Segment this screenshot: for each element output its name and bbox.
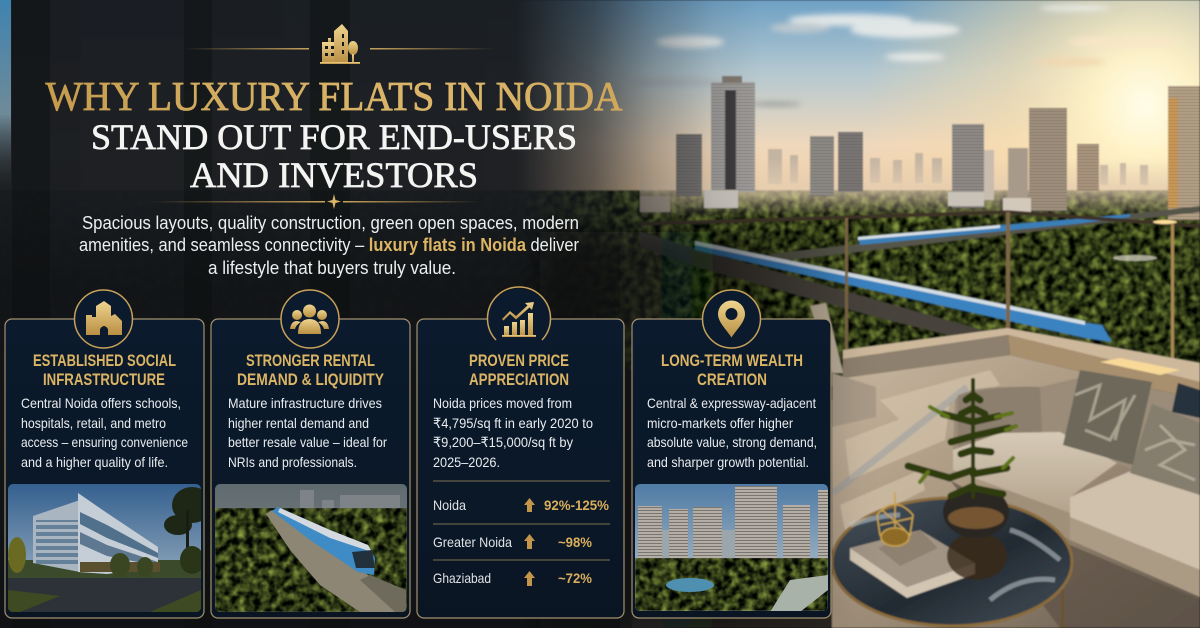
row: Greater Noida [433, 534, 593, 550]
heading: LONG-TERM WEALTH [661, 352, 803, 370]
icon: rising bar chart [488, 287, 551, 354]
light streak on floor [833, 387, 967, 493]
row: Noida [433, 497, 610, 513]
sky [0, 0, 1200, 240]
sun glow [800, 0, 1200, 320]
river glint [1113, 255, 1157, 261]
body text: higher rental demand and [228, 415, 369, 431]
row: Greater Noida: ~98% [558, 534, 593, 550]
row: Ghaziabad [433, 570, 593, 586]
table rules [433, 480, 610, 560]
body text [647, 395, 817, 470]
heading: CREATION [697, 371, 767, 389]
sofa [953, 373, 1200, 597]
panel: long-term wealth creation [632, 290, 831, 618]
row: Ghaziabad: Ghaziabad [433, 570, 491, 586]
body text: Central Noida offers schools, [21, 395, 181, 411]
dark overlay on left of photo [0, 0, 760, 628]
lower foliage behind glass [640, 226, 1200, 386]
shadow over trees behind cards [540, 232, 860, 628]
bottom left darkening [0, 200, 620, 628]
terrace floor [832, 355, 1200, 628]
glass railing [640, 212, 1200, 374]
dark glass vase [943, 486, 1009, 580]
subtitle paragraph [79, 213, 579, 278]
title line 3: AND INVESTORS [190, 155, 478, 195]
title line 2: STAND OUT FOR END-USERS [91, 117, 577, 157]
gold lantern [877, 492, 913, 546]
icon: gold buildings crest [320, 24, 360, 64]
body text: NRIs and professionals. [228, 454, 357, 470]
fern plant [908, 380, 1016, 497]
row: Ghaziabad: ~72% [558, 570, 593, 586]
crest rules [185, 48, 494, 50]
body text: and a higher quality of life. [21, 454, 168, 470]
terrace parapet [843, 328, 1200, 400]
body text: Noida prices moved from [433, 395, 572, 411]
title [46, 73, 623, 195]
icon: group of people [281, 290, 339, 348]
photo: metro train on viaduct [215, 484, 407, 612]
near metro viaduct [640, 232, 1000, 348]
body text: better resale value – ideal for [228, 434, 387, 450]
row: Greater Noida: Greater Noida [433, 534, 512, 550]
body text: ₹9,200–₹15,000/sq ft by [433, 434, 573, 450]
heading: DEMAND & LIQUIDITY [237, 371, 384, 389]
panel: stronger rental demand and liquidity [211, 290, 410, 618]
card background [211, 319, 410, 618]
icon: city buildings [74, 290, 132, 348]
body text [433, 395, 593, 470]
far metro viaduct and train [770, 206, 1200, 261]
photo: residential towers and gardens [635, 484, 828, 612]
subtitle paragraph: Spacious layouts, quality construction, green open spaces, modern [82, 213, 579, 233]
trees and city ground [0, 190, 1200, 370]
body text: absolute value, strong demand, [647, 434, 817, 450]
blue sky strip at left edge [0, 0, 11, 190]
row: Noida: 92%-125% [544, 497, 610, 513]
row: Noida: Noida [433, 497, 466, 513]
icon: location pin [702, 290, 760, 348]
heading: ESTABLISHED SOCIAL [33, 352, 176, 370]
body text: 2025–2026. [433, 454, 500, 470]
floor shade under cards [632, 400, 832, 628]
subtitle paragraph: a lifestyle that buyers truly value. [208, 258, 456, 278]
body text [228, 395, 387, 470]
card background [5, 319, 204, 618]
stack of books [850, 530, 975, 598]
body text [21, 395, 188, 470]
round marble coffee table [832, 498, 1072, 628]
distant hazy skyline [768, 149, 1148, 185]
dark floor under sofa [950, 480, 1200, 628]
panel: proven price appreciation [417, 287, 624, 618]
heading: STRONGER RENTAL [246, 352, 375, 370]
near metro train [695, 241, 1112, 342]
body text: access – ensuring convenience [21, 434, 188, 450]
marble light patches [840, 370, 1000, 530]
tall residential towers [640, 76, 1200, 220]
body text: and sharper growth potential. [647, 454, 809, 470]
ornamental divider [150, 194, 480, 209]
body text: Central & expressway-adjacent [647, 395, 816, 411]
card background [417, 319, 624, 618]
subtitle paragraph: amenities, and seamless connectivity – luxury flats in Noida deliver [79, 235, 579, 255]
body text: Mature infrastructure drives [228, 395, 382, 411]
body text: micro-markets offer higher [647, 415, 793, 431]
sofa cushions [1063, 370, 1200, 495]
side armchair [810, 303, 876, 427]
dark window frames [12, 0, 350, 628]
heading: INFRASTRUCTURE [43, 371, 165, 389]
body text: ₹4,795/sq ft in early 2020 to [433, 415, 593, 431]
clouds [634, 5, 1183, 106]
title line 1: WHY LUXURY FLATS IN NOIDA [46, 73, 623, 119]
heading: APPRECIATION [469, 371, 569, 389]
haze band on the horizon [640, 158, 1200, 218]
heading: PROVEN PRICE [469, 352, 569, 370]
panel: established social infrastructure [5, 290, 212, 618]
photo: hospital building [8, 484, 212, 612]
card background [632, 319, 831, 618]
body text: hospitals, retail, and metro [21, 415, 166, 431]
